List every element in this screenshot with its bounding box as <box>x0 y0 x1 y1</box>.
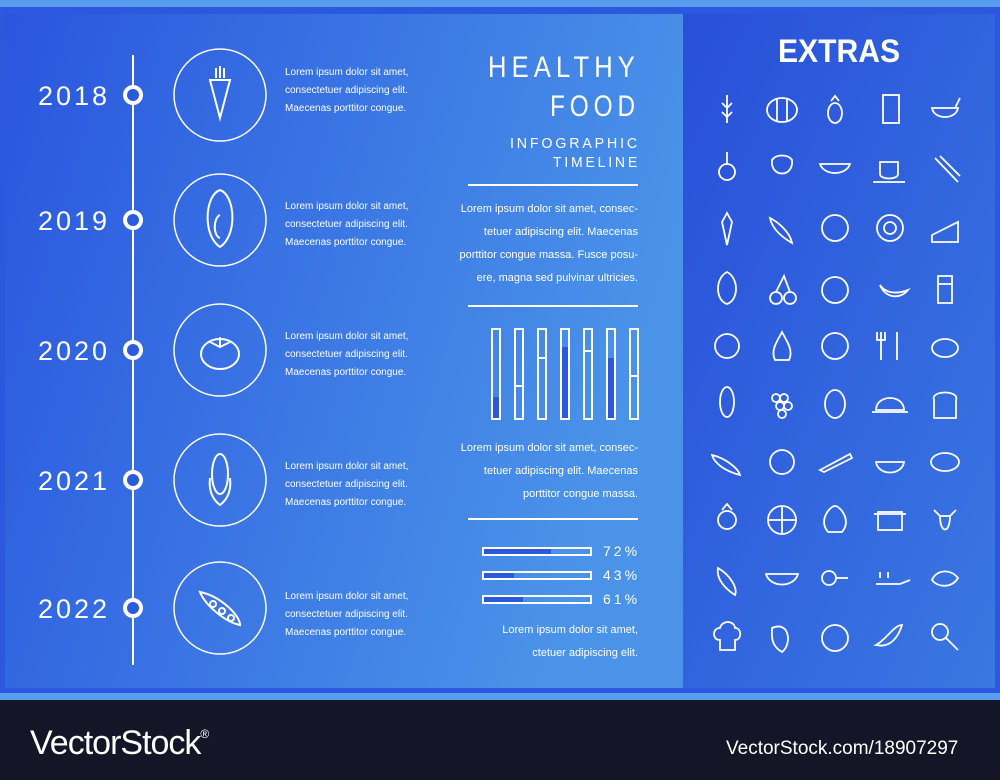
text blocks: Lorem ipsum dolor sit amet, <box>285 331 408 342</box>
text block center 2: porttitor congue massa. <box>523 488 638 500</box>
text blocks: Lorem ipsum dolor sit amet, <box>285 591 408 602</box>
footer logo: VectorStock <box>30 724 200 762</box>
text block center 1 <box>459 203 638 284</box>
footer logo: ® <box>200 727 209 741</box>
years: 2020 <box>38 336 110 366</box>
progress bars: 72% <box>603 543 640 559</box>
title: FOOD <box>550 90 640 123</box>
text block center 3: Lorem ipsum dolor sit amet, <box>502 624 638 636</box>
extras heading: EXTRAS <box>778 33 900 69</box>
text block center 2 <box>461 442 638 500</box>
years <box>38 81 110 624</box>
icon: corn <box>210 454 230 505</box>
text block center 1: Lorem ipsum dolor sit amet, consec- <box>461 203 638 215</box>
title: HEALTHY <box>488 51 640 84</box>
text blocks: Lorem ipsum dolor sit amet, <box>285 67 408 78</box>
years: 2022 <box>38 594 110 624</box>
text blocks: Maecenas porttitor congue. <box>285 103 406 114</box>
title <box>488 51 640 171</box>
panel: main timeline <box>5 14 683 688</box>
years: 2019 <box>38 206 110 236</box>
years: 2018 <box>38 81 110 111</box>
text blocks: Lorem ipsum dolor sit amet, <box>285 461 408 472</box>
progress bars: 43% <box>603 567 640 583</box>
footer bar <box>0 700 1000 780</box>
icon grid: extras <box>712 95 960 652</box>
text block center 2: tetuer adipiscing elit. Maecenas <box>484 465 638 477</box>
years: 2021 <box>38 466 110 496</box>
text block center 3 <box>502 624 638 659</box>
text block center 1: ere, magna sed pulvinar ultricies. <box>477 272 638 284</box>
text blocks: Maecenas porttitor congue. <box>285 497 406 508</box>
text blocks <box>285 67 408 638</box>
progress bars <box>483 543 640 607</box>
icon: avocado <box>208 190 232 247</box>
text blocks: consectetuer adipiscing elit. <box>285 219 408 230</box>
text blocks: Maecenas porttitor congue. <box>285 627 406 638</box>
text blocks: consectetuer adipiscing elit. <box>285 349 408 360</box>
text blocks: Maecenas porttitor congue. <box>285 237 406 248</box>
icon: carrot <box>210 66 230 118</box>
footer id: VectorStock.com/18907297 <box>726 738 958 759</box>
text block center 2: Lorem ipsum dolor sit amet, consec- <box>461 442 638 454</box>
title: TIMELINE <box>553 154 640 171</box>
text blocks: Lorem ipsum dolor sit amet, <box>285 201 408 212</box>
text blocks: Maecenas porttitor congue. <box>285 367 406 378</box>
bar chart <box>492 329 638 419</box>
panel: extras <box>683 14 995 688</box>
text blocks: consectetuer adipiscing elit. <box>285 85 408 96</box>
text block center 3: ctetuer adipiscing elit. <box>532 647 638 659</box>
icon: tomato <box>201 337 239 369</box>
timeline axis <box>132 55 134 665</box>
progress bars: 61% <box>603 591 640 607</box>
text blocks: consectetuer adipiscing elit. <box>285 609 408 620</box>
text block center 1: tetuer adipiscing elit. Maecenas <box>484 226 638 238</box>
text block center 1: porttitor congue massa. Fusce posu- <box>459 249 638 261</box>
title: INFOGRAPHIC <box>510 135 640 152</box>
text blocks: consectetuer adipiscing elit. <box>285 479 408 490</box>
timeline entries <box>125 49 266 654</box>
icon: peas <box>200 592 240 625</box>
